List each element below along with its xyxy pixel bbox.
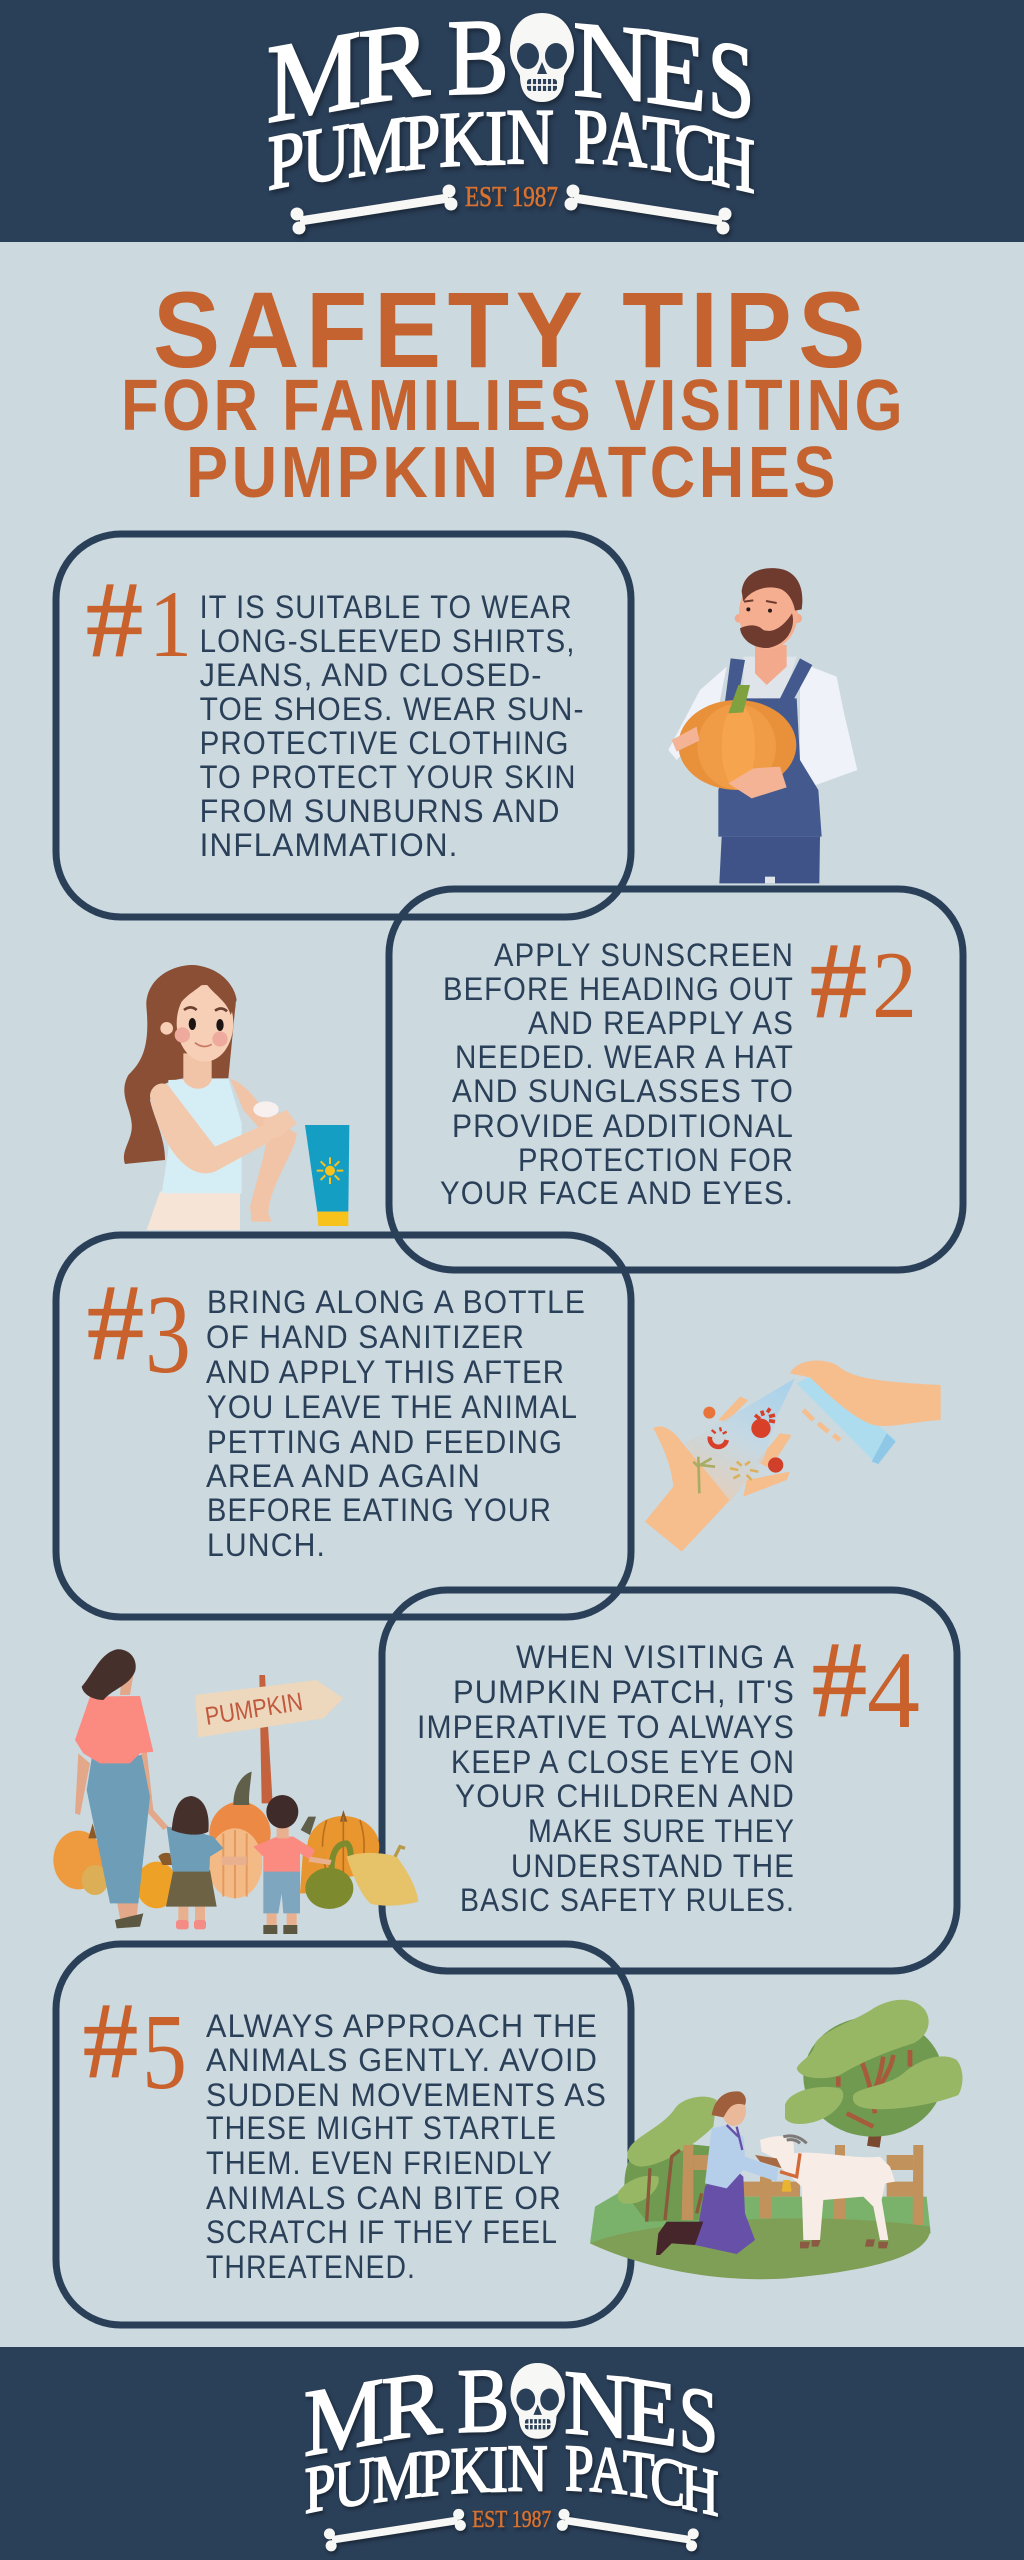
panel: tip 2: # bbox=[810, 922, 867, 1041]
icon: family at pumpkin patch bbox=[53, 1649, 418, 1934]
logo: footer: K bbox=[450, 2433, 491, 2508]
panel: tip 3: PETTING AND FEEDING bbox=[207, 1424, 563, 1460]
panel: tip 2 bbox=[389, 889, 963, 1270]
panel: tip 4: MAKE SURE THEY bbox=[528, 1813, 795, 1849]
logo: footer: C bbox=[651, 2441, 685, 2521]
sign: PUMPKIN bbox=[203, 1688, 305, 1731]
icon: woman applying sunscreen bbox=[124, 965, 349, 1230]
panel: tip 2: AND SUNGLASSES TO bbox=[452, 1073, 794, 1109]
panel: tip 3: AREA AND AGAIN bbox=[206, 1458, 481, 1494]
logo: header: P bbox=[268, 112, 304, 207]
footer band bbox=[0, 2347, 1024, 2560]
logo: footer: S bbox=[678, 2365, 718, 2475]
title: FOR FAMILIES VISITING bbox=[121, 366, 906, 446]
logo: footer: U bbox=[334, 2443, 374, 2524]
bones and est date bbox=[290, 181, 732, 234]
mother bbox=[75, 1649, 168, 1928]
logo: footer: P bbox=[420, 2435, 451, 2512]
logo: footer: A bbox=[590, 2432, 627, 2508]
logo: footer: R bbox=[381, 2350, 443, 2460]
panel: tip 1: TOE SHOES. WEAR SUN- bbox=[200, 691, 585, 727]
logo: header: E bbox=[646, 5, 706, 135]
panel: tip 1: IT IS SUITABLE TO WEAR bbox=[200, 589, 573, 625]
logo: header: N bbox=[506, 94, 554, 180]
footer bones and est date bbox=[324, 2506, 699, 2551]
sign bbox=[195, 1680, 343, 1737]
panel: tip 4: UNDERSTAND THE bbox=[511, 1848, 795, 1884]
panel: tip 3: OF HAND SANITIZER bbox=[206, 1319, 525, 1355]
panel: tip 2: YOUR FACE AND EYES. bbox=[440, 1175, 794, 1211]
girl bbox=[166, 1796, 247, 1929]
woman kneeling bbox=[656, 2091, 782, 2255]
logo: footer: P bbox=[305, 2449, 336, 2528]
panel: tip 5 bbox=[56, 1944, 631, 2325]
panel: tip 2: BEFORE HEADING OUT bbox=[443, 971, 794, 1007]
logo: header: H bbox=[711, 114, 755, 211]
logo: footer: M bbox=[304, 2358, 384, 2477]
panel: tip 1: 1 bbox=[149, 571, 192, 677]
panel: tip 1: LONG-SLEEVED SHIRTS, bbox=[200, 623, 576, 659]
panel: tip 4: IMPERATIVE TO ALWAYS bbox=[417, 1709, 795, 1745]
panel: tip 4: PUMPKIN PATCH, IT'S bbox=[453, 1674, 795, 1710]
panel: tip 2: PROTECTION FOR bbox=[518, 1142, 794, 1178]
header band bbox=[0, 0, 1024, 242]
logo: header: C bbox=[675, 105, 715, 200]
logo: footer: E bbox=[626, 2357, 677, 2467]
logo: header: P bbox=[404, 97, 440, 187]
panel: tip 5: SCRATCH IF THEY FEEL bbox=[206, 2214, 558, 2250]
logo: header: U bbox=[302, 106, 350, 201]
logo: footer: P bbox=[565, 2431, 594, 2506]
panel: tip 3: YOU LEAVE THE ANIMAL bbox=[207, 1389, 578, 1425]
panel: tip 3: BRING ALONG A BOTTLE bbox=[207, 1284, 586, 1320]
logo: header: R bbox=[358, 0, 431, 128]
panel: tip 5: 5 bbox=[142, 1993, 187, 2112]
panel: tip 5: ALWAYS APPROACH THE bbox=[206, 2008, 598, 2044]
logo: header bbox=[267, 0, 755, 235]
panel: tip 2: AND REAPPLY AS bbox=[528, 1005, 794, 1041]
logo: header: M bbox=[348, 100, 406, 194]
title: SAFETY TIPS bbox=[153, 269, 872, 390]
panel: tip 4: YOUR CHILDREN AND bbox=[455, 1778, 795, 1814]
bones and est date: EST 1987 bbox=[465, 181, 558, 213]
panel: tip 4: BASIC SAFETY RULES. bbox=[460, 1882, 795, 1918]
skull bbox=[510, 13, 574, 102]
logo: footer: T bbox=[623, 2435, 655, 2513]
panel: tip 1 bbox=[56, 534, 631, 917]
logo: footer: N bbox=[507, 2432, 548, 2506]
panel: tip 2: APPLY SUNSCREEN bbox=[494, 937, 794, 973]
panel: tip 1: INFLAMMATION. bbox=[200, 827, 459, 863]
panel: tip 5: ANIMALS GENTLY. AVOID bbox=[206, 2042, 598, 2078]
panel: tip 4: # bbox=[812, 1621, 867, 1740]
logo: header: S bbox=[708, 16, 754, 145]
panel: tip 4: WHEN VISITING A bbox=[516, 1639, 795, 1675]
icon: hand sanitizer spray bbox=[645, 1360, 941, 1552]
panel: tip 3: AND APPLY THIS AFTER bbox=[206, 1354, 565, 1390]
logo: header: N bbox=[573, 0, 651, 125]
panel: tip 5: # bbox=[83, 1982, 138, 2101]
panel: tip 4 bbox=[382, 1590, 957, 1971]
logo: footer: B bbox=[457, 2349, 509, 2452]
panel: tip 1: # bbox=[86, 561, 143, 680]
logo: header: I bbox=[485, 95, 507, 182]
logo: header: M bbox=[267, 6, 361, 147]
logo: footer: H bbox=[681, 2448, 719, 2530]
panel: tip 5: THESE MIGHT STARTLE bbox=[206, 2110, 557, 2146]
panel: tip 1: JEANS, AND CLOSED- bbox=[200, 657, 543, 693]
panel: tip 4: KEEP A CLOSE EYE ON bbox=[451, 1744, 795, 1780]
logo: header: K bbox=[439, 94, 487, 184]
icon: woman petting goat bbox=[590, 2000, 962, 2279]
footer bones and est date: EST 1987 bbox=[472, 2506, 551, 2533]
panel: tip 3: LUNCH. bbox=[207, 1527, 326, 1563]
panel: tip 5: SUDDEN MOVEMENTS AS bbox=[206, 2077, 607, 2113]
logo: footer bbox=[304, 2349, 719, 2551]
title: PUMPKIN PATCHES bbox=[186, 433, 839, 513]
panel: tip 3: # bbox=[87, 1264, 144, 1383]
logo: header: T bbox=[642, 99, 680, 190]
title bbox=[121, 269, 906, 513]
panel: tip 5: THREATENED. bbox=[206, 2249, 416, 2285]
logo: footer: M bbox=[373, 2437, 422, 2518]
panel: tip 4: 4 bbox=[867, 1629, 920, 1751]
logo: header: A bbox=[603, 95, 647, 185]
panel: tip 5: THEM. EVEN FRIENDLY bbox=[206, 2145, 553, 2181]
logo: footer: I bbox=[489, 2433, 508, 2507]
logo: footer: N bbox=[564, 2351, 630, 2458]
panel: tip 2: 2 bbox=[872, 932, 917, 1038]
boy bbox=[253, 1795, 332, 1934]
panel: tip 5: ANIMALS CAN BITE OR bbox=[206, 2180, 562, 2216]
panel: tip 1: FROM SUNBURNS AND bbox=[200, 793, 561, 829]
panel: tip 3 bbox=[56, 1235, 631, 1617]
icon: farmer with pumpkin bbox=[668, 568, 857, 883]
panel: tip 1: TO PROTECT YOUR SKIN bbox=[200, 759, 577, 795]
panel: tip 1: PROTECTIVE CLOTHING bbox=[200, 725, 570, 761]
panel: tip 3: 3 bbox=[145, 1273, 191, 1397]
panel: tip 2: PROVIDE ADDITIONAL bbox=[452, 1108, 794, 1144]
panel: tip 2: NEEDED. WEAR A HAT bbox=[455, 1039, 794, 1075]
footer skull bbox=[510, 2363, 565, 2439]
goat bbox=[760, 2136, 895, 2248]
logo: header: P bbox=[574, 94, 608, 182]
panel: tip 3: BEFORE EATING YOUR bbox=[207, 1492, 552, 1528]
